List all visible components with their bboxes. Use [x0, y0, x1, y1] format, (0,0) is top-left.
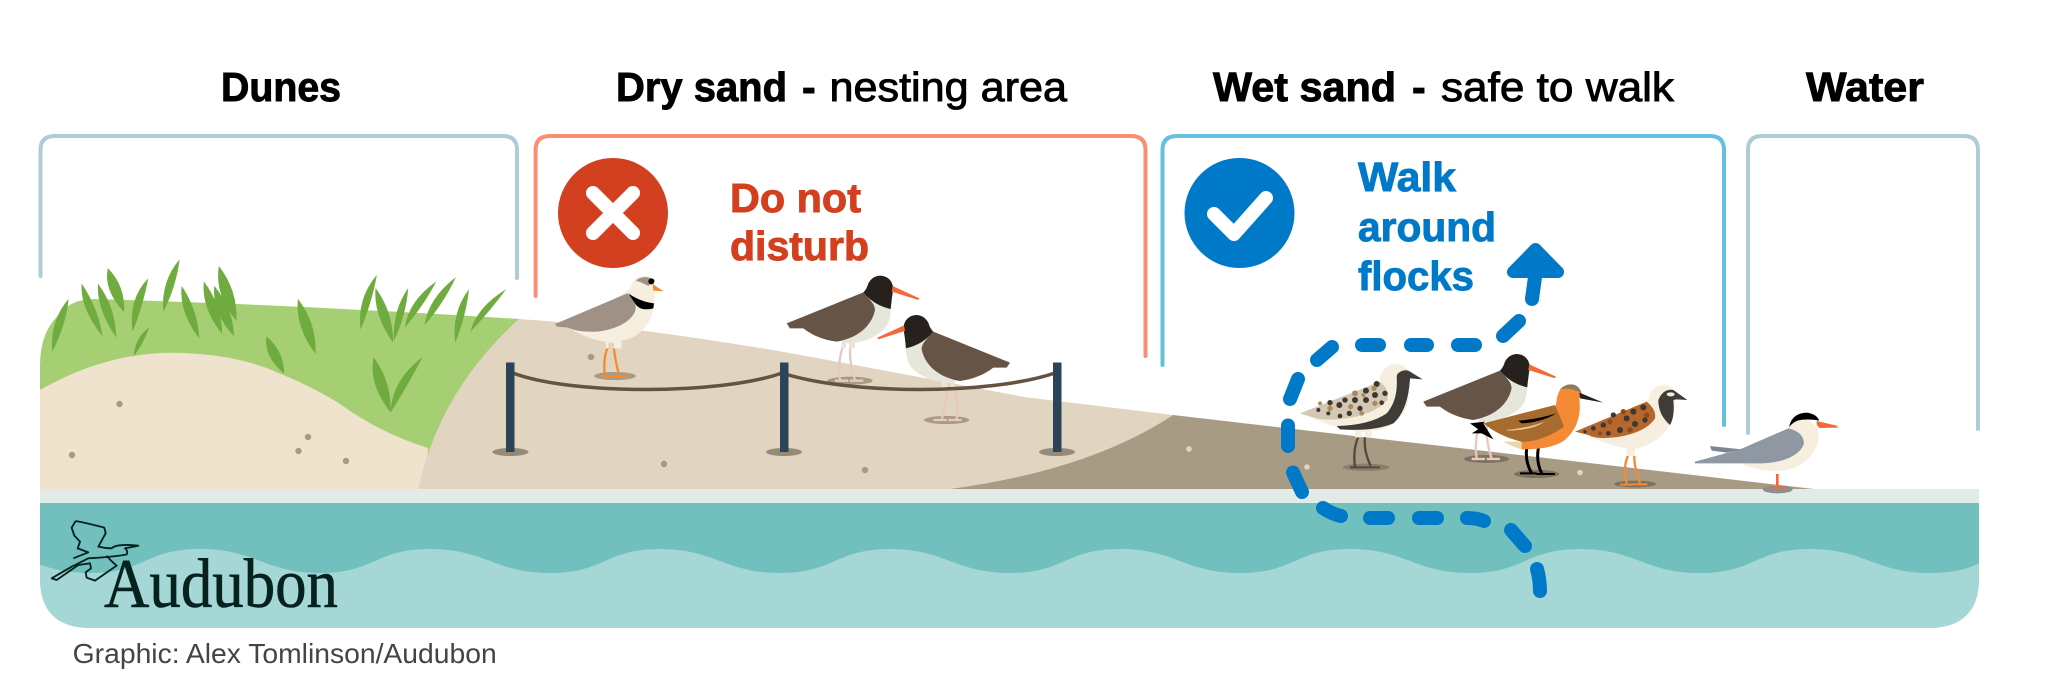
callout: Do not disturb [730, 175, 869, 269]
grass blades [52, 259, 506, 412]
bird: oystercatcher in flock [1423, 354, 1556, 463]
arrow: dashed walking route around flock [1288, 249, 1558, 591]
callout: Do not disturb: Do not [730, 175, 861, 221]
panel: dunes [40, 64, 519, 489]
bracket: wet sand [1162, 136, 1724, 425]
heading: Dunes: Dunes [221, 64, 341, 110]
wet shoreline strip [40, 489, 1979, 504]
sand specks [1186, 446, 1583, 475]
bird: common tern [1695, 413, 1838, 493]
heading: Dry sand - nesting area [616, 64, 1067, 110]
heading: Wet sand - safe to walk: safe to walk [1441, 64, 1675, 110]
logo wordmark: Audubon [104, 546, 338, 623]
icon: blue check [1184, 158, 1294, 268]
panel: water zone [1695, 64, 1978, 493]
bracket: dunes [40, 136, 517, 278]
icon: heron outline [52, 521, 138, 581]
wet sand ground [950, 415, 1814, 489]
heading: Dry sand - nesting area: Dry sand [616, 64, 787, 110]
bird: black-bellied plover [1300, 364, 1423, 471]
heading: Dry sand - nesting area: - [802, 64, 816, 110]
bird: piping plover [555, 276, 664, 380]
dry sand ground [418, 319, 1173, 489]
heading: Water: Water [1806, 64, 1924, 110]
heading: Wet sand - safe to walk: Wet sand [1213, 64, 1396, 110]
heading: Wet sand - safe to walk: - [1412, 64, 1426, 110]
deep water [40, 503, 1979, 628]
callout: Walk around flocks [1358, 154, 1496, 299]
bird: oystercatcher [787, 276, 919, 385]
bird: red knot [1470, 384, 1603, 478]
rope barrier [492, 362, 1075, 456]
heading: Dry sand - nesting area: nesting area [830, 64, 1067, 110]
sand specks [69, 401, 349, 464]
shallow water waves [40, 549, 1979, 628]
logo: Audubon heron [52, 521, 338, 623]
icon: red X [558, 158, 668, 268]
green dune [40, 299, 519, 470]
bird: oystercatcher facing left [877, 315, 1010, 424]
callout: Walk around flocks: Walk [1358, 154, 1456, 200]
credit line: Graphic: Alex Tomlinson/Audubon [73, 638, 497, 669]
bracket: water [1748, 136, 1978, 433]
callout: Walk around flocks: around [1358, 204, 1496, 250]
heading: Wet sand - safe to walk [1213, 64, 1675, 110]
sand specks [588, 354, 868, 473]
bracket: dry sand [536, 136, 1146, 356]
panel: wet sand safe to walk [950, 64, 1814, 489]
sand dune [40, 353, 428, 489]
panel: dry sand nesting area [418, 64, 1173, 489]
callout: Do not disturb: disturb [730, 223, 869, 269]
callout: Walk around flocks: flocks [1358, 253, 1474, 299]
bird: ruddy turnstone [1575, 384, 1687, 487]
panel: water band [40, 489, 1979, 628]
